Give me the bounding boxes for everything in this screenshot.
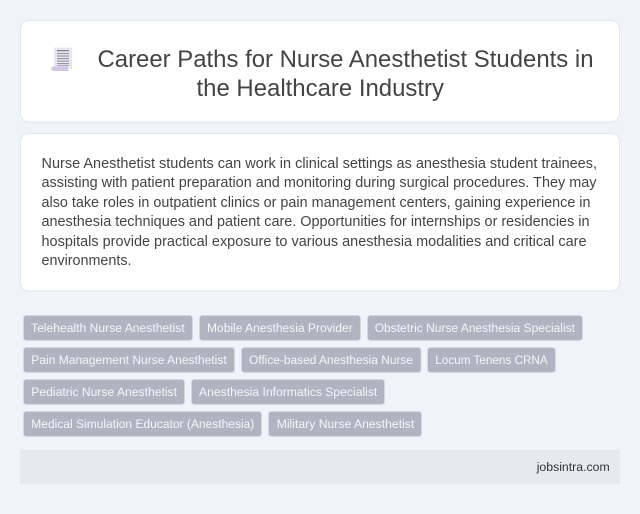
- text block: description: [42, 156, 597, 269]
- tag: Mobile Anesthesia Provider: Mobile Anesthesia Provider: [207, 321, 353, 335]
- footer source text: jobsintra.com: [536, 460, 610, 474]
- tag: Anesthesia Informatics Specialist: [192, 380, 384, 404]
- tag: Military Nurse Anesthetist: [268, 412, 422, 436]
- tag: Obstetric Nurse Anesthesia Specialist: Obstetric Nurse Anesthesia Specialist: [375, 321, 576, 335]
- tag: Anesthesia Informatics Specialist: Anesthesia Informatics Specialist: [199, 385, 378, 399]
- tag: Pain Management Nurse Anesthetist: [24, 348, 234, 372]
- tag: Locum Tenens CRNA: Locum Tenens CRNA: [435, 353, 548, 367]
- panel: header: [20, 20, 620, 122]
- tag: Mobile Anesthesia Provider: [200, 316, 360, 340]
- text block: description: Nurse Anesthetist students can work in clinical settings as anesthesia student trainees,: [42, 156, 597, 172]
- tag list: career paths: [24, 316, 582, 436]
- text block: description: also take roles in outpatient clinics or pain management centers, gaining experience in: [42, 195, 591, 211]
- tag: Obstetric Nurse Anesthesia Specialist: [368, 316, 582, 340]
- text block: description: environments.: [42, 253, 132, 269]
- tag: Medical Simulation Educator (Anesthesia): Medical Simulation Educator (Anesthesia): [31, 417, 254, 431]
- tag: Telehealth Nurse Anesthetist: Telehealth Nurse Anesthetist: [31, 321, 185, 335]
- title: Career Paths for Nurse Anesthetist Students in: [98, 46, 594, 73]
- title: the Healthcare Industry: [196, 75, 444, 102]
- tag: Office-based Anesthesia Nurse: [242, 348, 421, 372]
- text block: description: assisting with patient preparation and monitoring during surgical procedures. They may: [42, 175, 597, 191]
- footer: [20, 450, 620, 484]
- icon: document scroll: [51, 48, 72, 71]
- tag: Locum Tenens CRNA: [428, 348, 556, 372]
- text block: description: hospitals provide practical exposure to various anesthesia modalities and critical care: [42, 234, 587, 250]
- tag: Office-based Anesthesia Nurse: Office-based Anesthesia Nurse: [249, 353, 413, 367]
- tag: Pediatric Nurse Anesthetist: [24, 380, 184, 404]
- tag: Medical Simulation Educator (Anesthesia): [24, 412, 262, 436]
- tag: Military Nurse Anesthetist: Military Nurse Anesthetist: [277, 417, 415, 431]
- tag: Telehealth Nurse Anesthetist: [24, 316, 192, 340]
- text block: description: anesthesia techniques and patient care. Opportunities for internships or residencies in: [42, 214, 590, 230]
- tag: Pain Management Nurse Anesthetist: Pain Management Nurse Anesthetist: [31, 353, 227, 367]
- panel: description: [20, 134, 620, 291]
- title: [98, 46, 594, 102]
- tag: Pediatric Nurse Anesthetist: Pediatric Nurse Anesthetist: [31, 385, 178, 399]
